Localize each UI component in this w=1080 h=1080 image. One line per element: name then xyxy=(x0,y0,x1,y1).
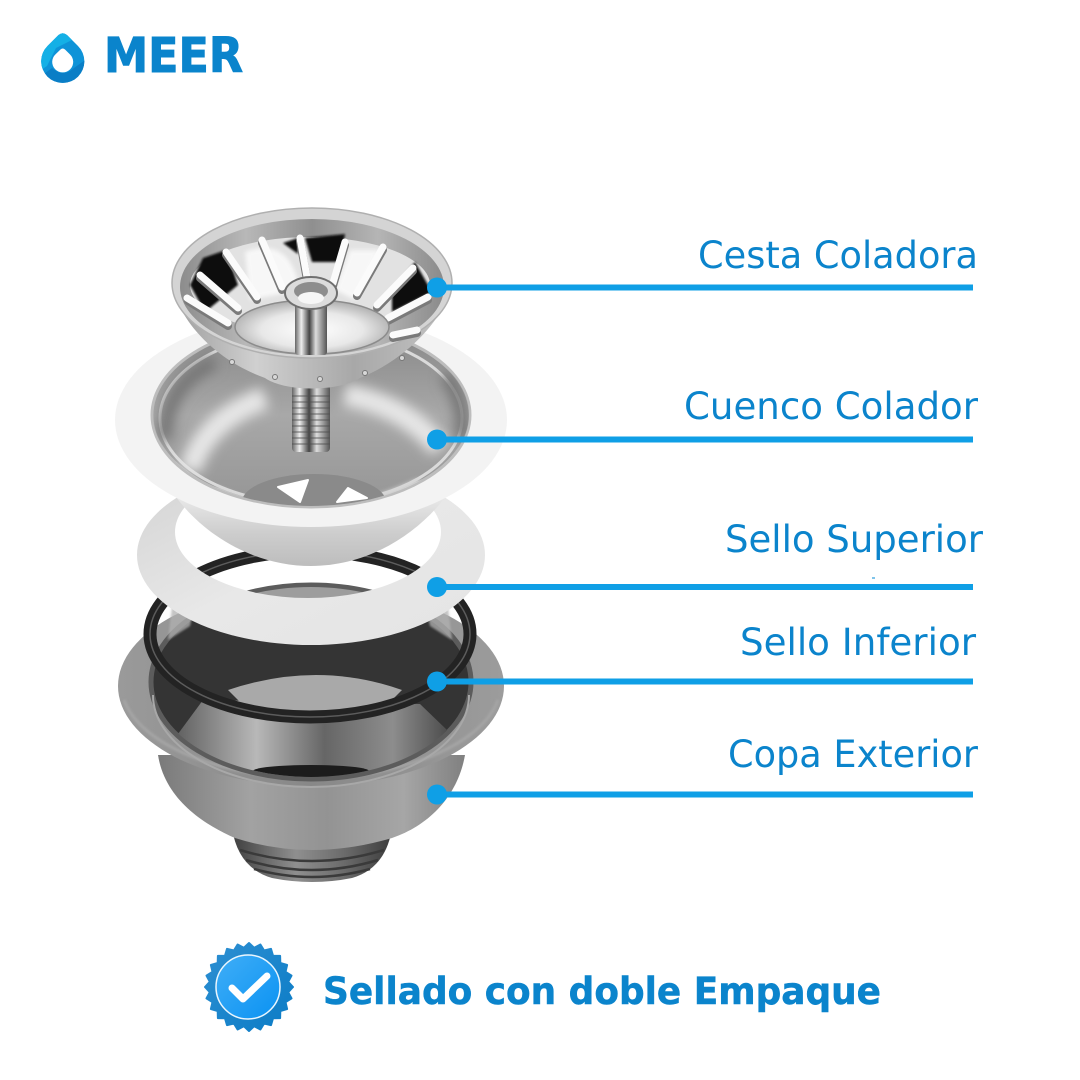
sello inferior: black ring xyxy=(150,551,470,717)
cesta coladora xyxy=(172,208,452,388)
threaded tail xyxy=(232,828,392,882)
cup body xyxy=(158,755,465,850)
cuenco colador xyxy=(115,313,507,566)
callout: Sello Superior: Sello Superior xyxy=(725,518,984,561)
icon: water drop xyxy=(41,33,84,83)
illustration: exploded strainer xyxy=(115,208,507,882)
dark openings xyxy=(190,234,432,312)
callout: Cuenco Colador xyxy=(427,385,979,450)
icon: verified seal xyxy=(205,943,293,1031)
bowl body xyxy=(168,485,454,566)
bowl rim xyxy=(115,313,507,527)
inner rim xyxy=(151,585,471,779)
callout: Cesta Coladora xyxy=(427,234,978,298)
basket interior xyxy=(180,219,444,355)
logo: MEER xyxy=(41,33,243,83)
slats xyxy=(187,238,428,338)
bowl interior xyxy=(152,323,470,507)
knob xyxy=(285,277,337,309)
flange xyxy=(118,586,504,786)
basket stem thread xyxy=(292,385,330,452)
callout: Sello Superior xyxy=(427,518,984,597)
wordmark: MEER xyxy=(104,28,243,84)
basket body xyxy=(172,283,452,388)
knob stem xyxy=(295,303,327,355)
callout: Cesta Coladora: Cesta Coladora xyxy=(698,234,978,277)
slat ring xyxy=(190,237,430,333)
sello superior: white ring xyxy=(137,465,485,645)
callout: Cuenco Colador: Cuenco Colador xyxy=(684,385,979,428)
callout: Copa Exterior: Copa Exterior xyxy=(728,733,979,776)
basket rim xyxy=(172,208,452,358)
callout: Sello Inferior: Sello Inferior xyxy=(740,621,977,664)
callout: Sello Inferior xyxy=(427,621,977,692)
bottom plate with holes xyxy=(243,474,384,506)
callout: Copa Exterior xyxy=(427,733,979,804)
wall reflections xyxy=(168,600,452,640)
rivets xyxy=(230,356,404,382)
tagline: Sellado con doble Empaque xyxy=(323,970,881,1013)
outer cup xyxy=(118,585,504,882)
inner cone xyxy=(175,585,447,780)
centre disk xyxy=(235,300,389,354)
